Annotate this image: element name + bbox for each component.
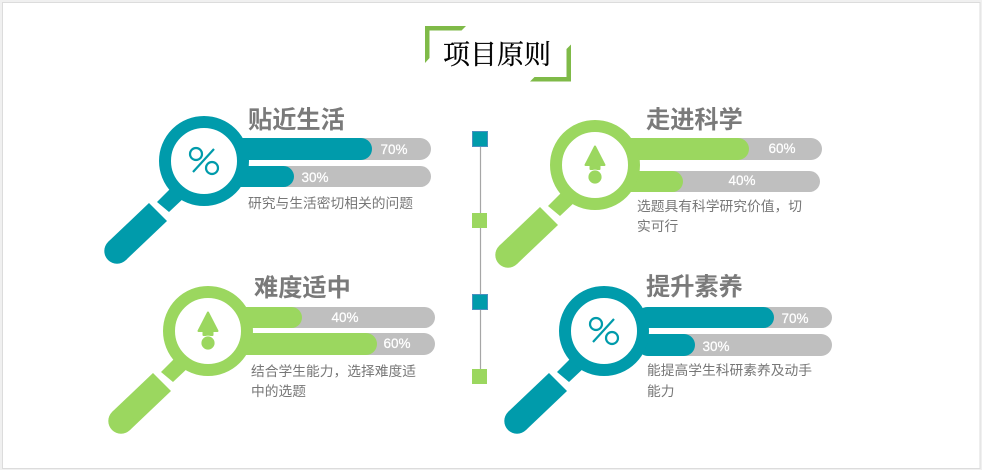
description: [637, 199, 802, 234]
progress bar 30%: 30%: [301, 170, 329, 185]
description: 实可行: [637, 219, 679, 234]
magnifier with percent icon: [504, 292, 643, 434]
panel: 走进科学: [495, 107, 822, 268]
heading: 走进科学: [646, 107, 743, 134]
progress bar 30%: 30%: [702, 339, 730, 354]
panel: 难度适中: [108, 275, 435, 434]
panel: 提升素养: [504, 274, 832, 434]
magnifier with percent icon: [104, 122, 243, 264]
description: 中的选题: [251, 384, 306, 399]
title with green brackets: [425, 26, 571, 82]
magnifier with arrow icon: [108, 292, 247, 434]
description: 选题具有科学研究价值，切: [637, 199, 802, 214]
progress bar 40%: [616, 171, 820, 192]
progress bar 70%: 70%: [781, 311, 809, 326]
description: 能力: [647, 384, 675, 399]
central timeline: [472, 132, 488, 384]
description: [251, 364, 416, 399]
progress bar 70%: 70%: [380, 142, 408, 157]
progress bar 60%: 60%: [768, 141, 796, 156]
heading: 难度适中: [254, 275, 351, 302]
progress bar 30%: [225, 166, 431, 187]
progress bar 60%: 60%: [383, 336, 411, 351]
description: 结合学生能力，选择难度适: [251, 364, 416, 379]
description: 能提高学生科研素养及动手: [647, 362, 812, 378]
progress bar 70%: [225, 138, 431, 160]
title with green brackets: 项目原则: [443, 40, 551, 70]
progress bar 30%: [637, 334, 832, 356]
heading: 提升素养: [646, 274, 743, 301]
progress bar 40%: [229, 307, 435, 328]
description: 研究与生活密切相关的问题: [248, 195, 413, 211]
progress bar 60%: [616, 138, 822, 160]
progress bar 40%: 40%: [331, 310, 359, 325]
magnifier with arrow icon: [495, 126, 634, 268]
progress bar 40%: 40%: [728, 173, 756, 188]
description: [647, 362, 812, 399]
progress bar 70%: [637, 307, 832, 328]
heading: 贴近生活: [248, 107, 345, 134]
panel: 贴近生活: [104, 107, 431, 264]
progress bar 60%: [229, 333, 435, 355]
